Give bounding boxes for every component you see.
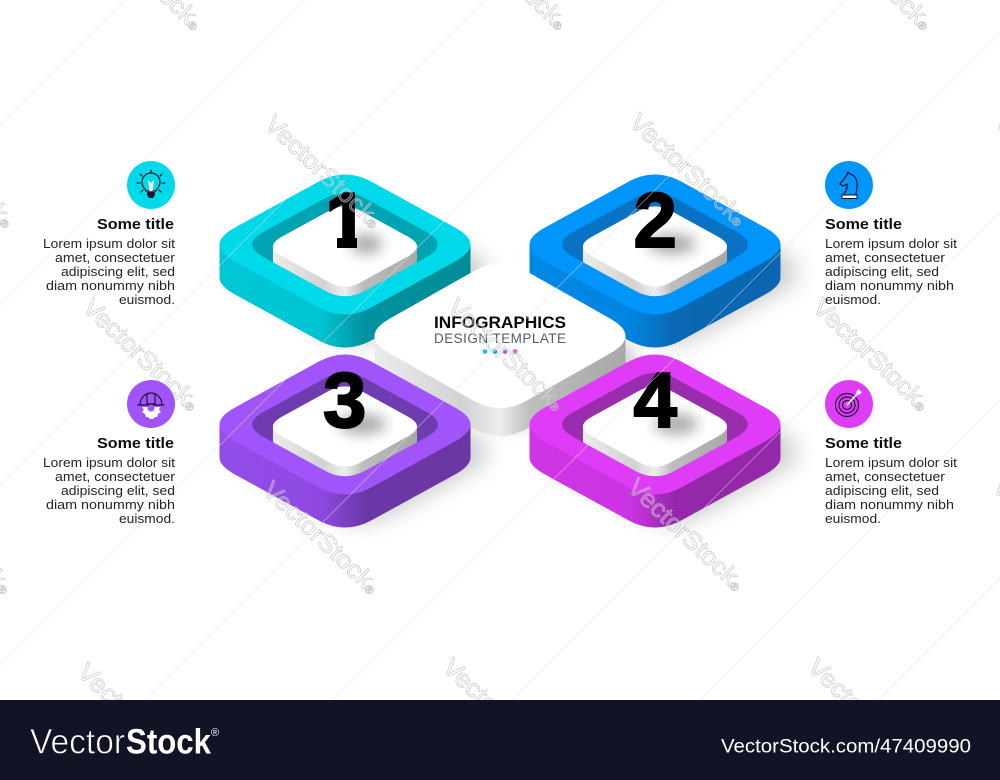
footer image id: VectorStock.com/47409990: [721, 736, 971, 758]
center dots: [483, 349, 517, 354]
step 4 text: Some title: [825, 435, 902, 452]
step 2 text: Lorem ipsum dolor sit: [825, 237, 958, 251]
center title: [434, 313, 566, 346]
footer logo: [30, 722, 219, 762]
step 4 text: euismod.: [825, 512, 881, 526]
footer logo: Stock: [126, 722, 211, 762]
step 2 text: Some title: [825, 216, 902, 233]
step 1 icon: light bulb: [127, 161, 175, 209]
watermarks: VectorStock®: [802, 653, 930, 777]
watermarks: VectorStock®: [72, 658, 200, 780]
step 3 text: adipiscing elit, sed: [61, 484, 175, 498]
center plate: [374, 264, 626, 436]
step 1 text: [43, 216, 176, 307]
number 3: 3: [323, 356, 366, 444]
watermarks: VectorStock®: [437, 653, 565, 777]
step 1 text: diam nonummy nibh: [46, 279, 175, 293]
watermarks: VectorStock®: [257, 476, 385, 600]
watermarks: VectorStock®: [442, 293, 570, 417]
step 4 icon: target and arrow: [825, 380, 873, 428]
watermarks: VectorStock®: [624, 108, 752, 232]
center title: DESIGN TEMPLATE: [434, 331, 566, 346]
watermarks: VectorStock®: [77, 293, 205, 417]
tile 1: [220, 174, 470, 348]
step 3 text: Some title: [97, 435, 174, 452]
step 4 text: amet, consectetuer: [825, 470, 945, 484]
watermarks: VectorStock®: [622, 473, 750, 597]
step 3 text: [43, 435, 176, 526]
tile shadows: [236, 202, 798, 522]
watermarks: VectorStock®: [259, 110, 387, 234]
tile 3: [220, 354, 470, 528]
center title: INFOGRAPHICS: [434, 313, 566, 332]
footer logo: ®: [211, 727, 219, 739]
number 2: 2: [634, 176, 677, 264]
step 2 text: amet, consectetuer: [825, 251, 945, 265]
number shadows: [338, 234, 698, 434]
watermarks: VectorStock®: [807, 293, 935, 417]
step 4 text: [825, 435, 958, 526]
step 2 text: diam nonummy nibh: [825, 279, 954, 293]
step 4 text: Lorem ipsum dolor sit: [825, 456, 958, 470]
step 2 text: [825, 216, 958, 307]
number 4: 4: [634, 356, 677, 444]
step 1 text: adipiscing elit, sed: [61, 265, 175, 279]
footer band: [0, 700, 1000, 780]
step 1 text: euismod.: [119, 293, 175, 307]
step 1 text: Lorem ipsum dolor sit: [43, 237, 176, 251]
step 2 text: adipiscing elit, sed: [825, 265, 939, 279]
step 1 text: amet, consectetuer: [55, 251, 175, 265]
step 2 text: euismod.: [825, 293, 881, 307]
step 3 text: diam nonummy nibh: [46, 498, 175, 512]
tile 2: [530, 174, 780, 348]
step 4 text: adipiscing elit, sed: [825, 484, 939, 498]
step 1 text: Some title: [97, 216, 174, 233]
step 3 icon: helmet and gear: [127, 380, 175, 428]
center plate shadow: [386, 290, 638, 430]
step 3 text: euismod.: [119, 512, 175, 526]
step 2 icon: chess knight: [825, 161, 873, 209]
number 1: 1: [325, 176, 368, 264]
footer logo: Vector: [30, 722, 125, 762]
step 3 text: Lorem ipsum dolor sit: [43, 456, 176, 470]
tile 4: [530, 354, 780, 528]
step 4 text: diam nonummy nibh: [825, 498, 954, 512]
step 3 text: amet, consectetuer: [55, 470, 175, 484]
